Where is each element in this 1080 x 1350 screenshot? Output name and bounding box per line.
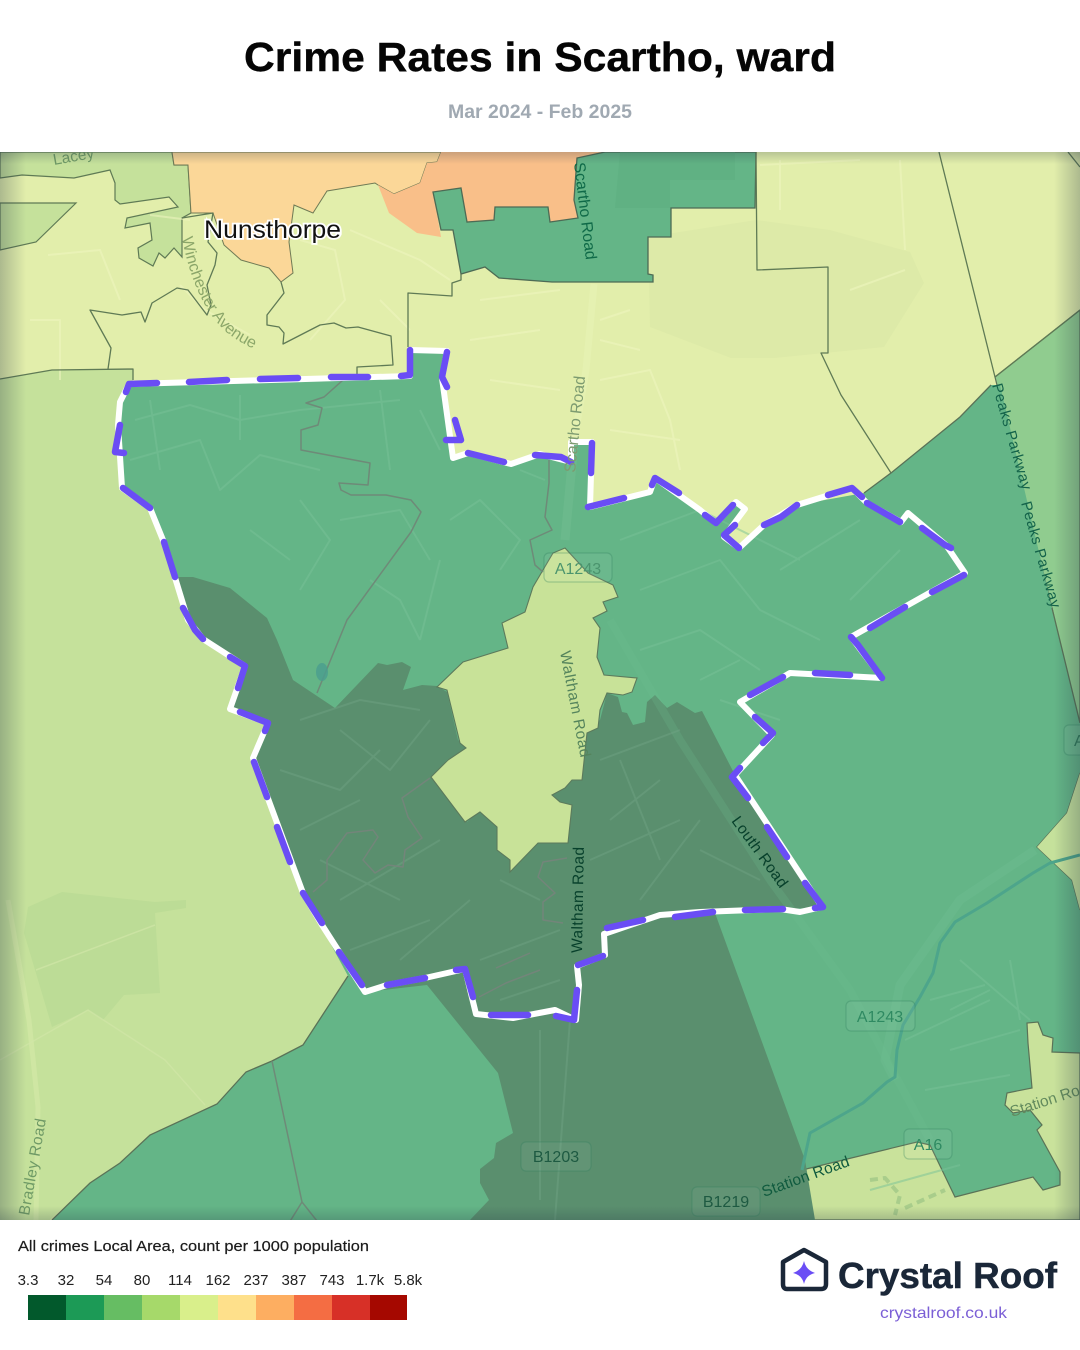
label: Station Road west: Station Road bbox=[760, 1153, 852, 1201]
area: south-east light green bbox=[802, 1022, 1080, 1220]
minor paths in west field bbox=[36, 924, 155, 1020]
road network bbox=[0, 160, 1080, 1220]
road shields bbox=[521, 553, 1080, 1216]
inner parish boundary lines bbox=[272, 380, 567, 1231]
area: ward and eastern mid green bbox=[52, 350, 1080, 1220]
area: north-west wedge bbox=[0, 203, 76, 250]
legend tick labels bbox=[18, 1272, 423, 1289]
area: Waltham Road pale green bbox=[431, 548, 637, 872]
shield: A16 bbox=[904, 1129, 952, 1159]
label: Winchester Avenue: Winchester Avenue bbox=[182, 236, 256, 348]
place label: Nunsthorpe: Nunsthorpe bbox=[204, 216, 341, 244]
shield: B1203 bbox=[521, 1142, 591, 1171]
wordmark: Crystal Roof bbox=[838, 1255, 1058, 1296]
label: Laceby: Lacey bbox=[52, 145, 96, 169]
brand logo bbox=[783, 1250, 1058, 1322]
date range subtitle: Mar 2024 - Feb 2025 bbox=[448, 102, 632, 123]
area: orange bbox=[378, 152, 605, 237]
legend tick labels: 1.7k bbox=[356, 1272, 385, 1289]
road along eastern curve bbox=[885, 850, 1035, 1080]
area: east edges outline bbox=[52, 385, 1080, 1220]
area: top-right shaded fields bbox=[648, 220, 924, 358]
legend tick labels: 237 bbox=[243, 1272, 269, 1289]
road labels bbox=[18, 152, 1080, 1215]
map edge vignette bbox=[0, 152, 1080, 1220]
title: Crime Rates in Scartho, ward bbox=[244, 34, 836, 80]
website url: crystalroof.co.uk bbox=[880, 1305, 1008, 1322]
pale area outlines bbox=[0, 152, 1080, 473]
legend tick labels: 80 bbox=[134, 1272, 150, 1289]
label: Peaks Parkway lower: Peaks Parkway bbox=[1017, 499, 1064, 610]
label: Scartho Road north: Scartho Road bbox=[570, 161, 599, 261]
shield: A1243 south: A1243 bbox=[857, 1009, 903, 1026]
shield: B1203: B1203 bbox=[533, 1149, 579, 1166]
shield: A1243 south bbox=[846, 1001, 915, 1031]
roads in pale northern area bbox=[30, 160, 905, 470]
icon: house with star bbox=[783, 1250, 826, 1289]
area: Nunsthorpe pale orange bbox=[172, 152, 441, 282]
legend bbox=[18, 1238, 423, 1320]
small pond bbox=[316, 663, 328, 681]
legend tick labels: 32 bbox=[58, 1272, 74, 1289]
label: Scartho Road south: Scartho Road bbox=[562, 375, 589, 473]
main road through ward bbox=[565, 442, 574, 540]
area: Scartho Road north mid green bbox=[433, 152, 756, 282]
waterway bbox=[802, 855, 1080, 1170]
legend tick labels: 743 bbox=[319, 1272, 345, 1289]
area: high-crime dark green band bbox=[178, 577, 823, 1220]
main road south of Waltham bbox=[652, 696, 795, 908]
shield: B1219: B1219 bbox=[703, 1194, 749, 1211]
shield: B1219 bbox=[692, 1187, 760, 1216]
main road through pale area bbox=[574, 284, 594, 442]
legend tick labels: 387 bbox=[281, 1272, 307, 1289]
area: Scartho north building patch bbox=[620, 152, 735, 153]
legend tick labels: 54 bbox=[96, 1272, 112, 1289]
area: south-west park bbox=[24, 892, 186, 1027]
shield: A1243 north bbox=[544, 553, 612, 582]
ward boundary: purple dashes bbox=[115, 350, 964, 1020]
shield: A16: A16 bbox=[914, 1137, 942, 1154]
label: Waltham Road south: Waltham Road bbox=[569, 847, 588, 953]
map base: low crime area bbox=[0, 152, 1080, 1220]
label: Bradley Road: Bradley Road bbox=[16, 1117, 50, 1217]
shield: east edge bbox=[1064, 725, 1080, 755]
roads in ward north bbox=[130, 390, 1030, 1190]
area: east light green strip bbox=[995, 310, 1080, 730]
legend tick labels: 3.3 bbox=[18, 1272, 38, 1289]
shield: A1243 north: A1243 bbox=[555, 561, 601, 578]
label: Louth Road: Louth Road bbox=[728, 813, 791, 891]
ward boundary: white casing bbox=[118, 350, 965, 1020]
Bradley Road line bbox=[8, 900, 38, 1220]
area: south-east corner patch bbox=[1037, 773, 1080, 910]
legend colour scale bbox=[28, 1295, 407, 1320]
label: Waltham Road north: Waltham Road bbox=[556, 650, 593, 759]
legend title: All crimes Local Area, count per 1000 population bbox=[18, 1238, 369, 1255]
label: Peaks Parkway upper: Peaks Parkway bbox=[988, 381, 1035, 492]
area: north-west light green bbox=[0, 152, 191, 266]
legend tick labels: 114 bbox=[168, 1272, 192, 1289]
railway line in south-east bbox=[870, 1178, 945, 1215]
roads in dark area bbox=[280, 700, 760, 1220]
legend tick labels: 5.8k bbox=[394, 1272, 423, 1289]
legend tick labels: 162 bbox=[205, 1272, 231, 1289]
area: west light green bbox=[0, 369, 348, 1220]
